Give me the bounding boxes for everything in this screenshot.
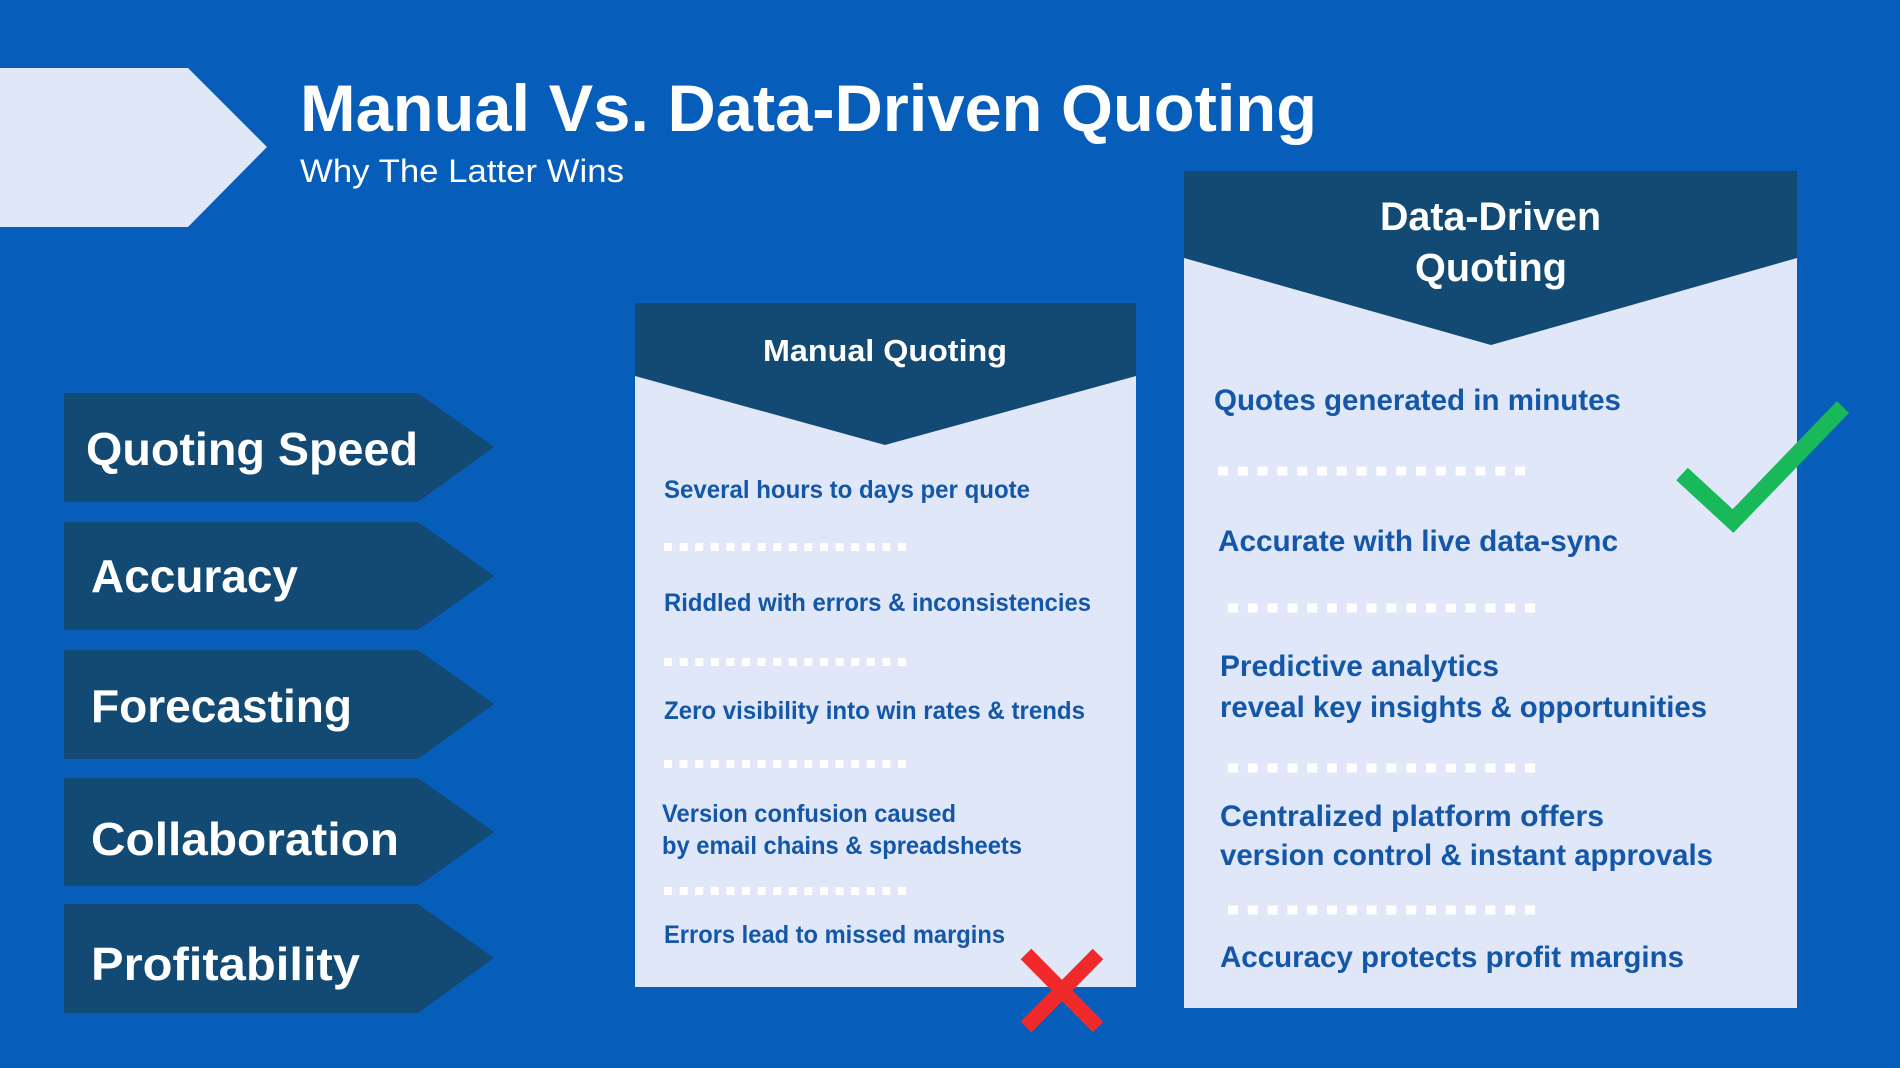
manual items: Version confusion caused [662,800,956,828]
manual heading text: Manual Quoting [763,333,1007,368]
label: Forecasting [64,650,494,759]
label: Collaboration: Collaboration [91,813,399,865]
label: Quoting Speed: Quoting Speed [86,423,418,475]
panel: data-driven quoting [1184,171,1797,1008]
data-driven items: Centralized platform offers [1220,800,1604,833]
icon: green check [1682,407,1843,521]
label: Collaboration [64,778,494,886]
manual items: Riddled with errors & inconsistencies [664,589,1091,617]
data-driven heading text: Data-Driven [1380,195,1601,239]
header arrow shape [0,68,267,227]
label: Profitability: Profitability [91,938,360,990]
label: Accuracy [64,522,494,630]
panel: manual quoting [635,303,1136,987]
manual items: by email chains & spreadsheets [662,832,1022,860]
manual items: Several hours to days per quote [664,476,1030,504]
subtitle: Why The Latter Wins [300,153,624,189]
data-driven items: reveal key insights & opportunities [1220,691,1707,724]
data-driven header [1184,171,1797,345]
data-driven items [1214,384,1713,974]
manual header [635,303,1136,445]
label: Accuracy: Accuracy [91,550,298,602]
manual items: Errors lead to missed margins [664,921,1005,949]
panel: data-driven quoting: Quoting [1415,246,1567,290]
label: Forecasting: Forecasting [91,680,352,732]
category labels [64,393,494,1013]
label: Profitability [64,904,494,1013]
data-driven items: Predictive analytics [1220,650,1499,683]
manual items: Zero visibility into win rates & trends [664,697,1085,725]
title: Manual Vs. Data-Driven Quoting [300,71,1317,145]
data-driven items: Quotes generated in minutes [1214,384,1621,417]
data-driven items: Accurate with live data-sync [1218,525,1618,558]
label: Quoting Speed [64,393,494,502]
icon: red cross [1026,954,1098,1027]
manual items [662,476,1091,949]
data-driven items: version control & instant approvals [1220,839,1713,872]
data-driven items: Accuracy protects profit margins [1220,941,1684,974]
